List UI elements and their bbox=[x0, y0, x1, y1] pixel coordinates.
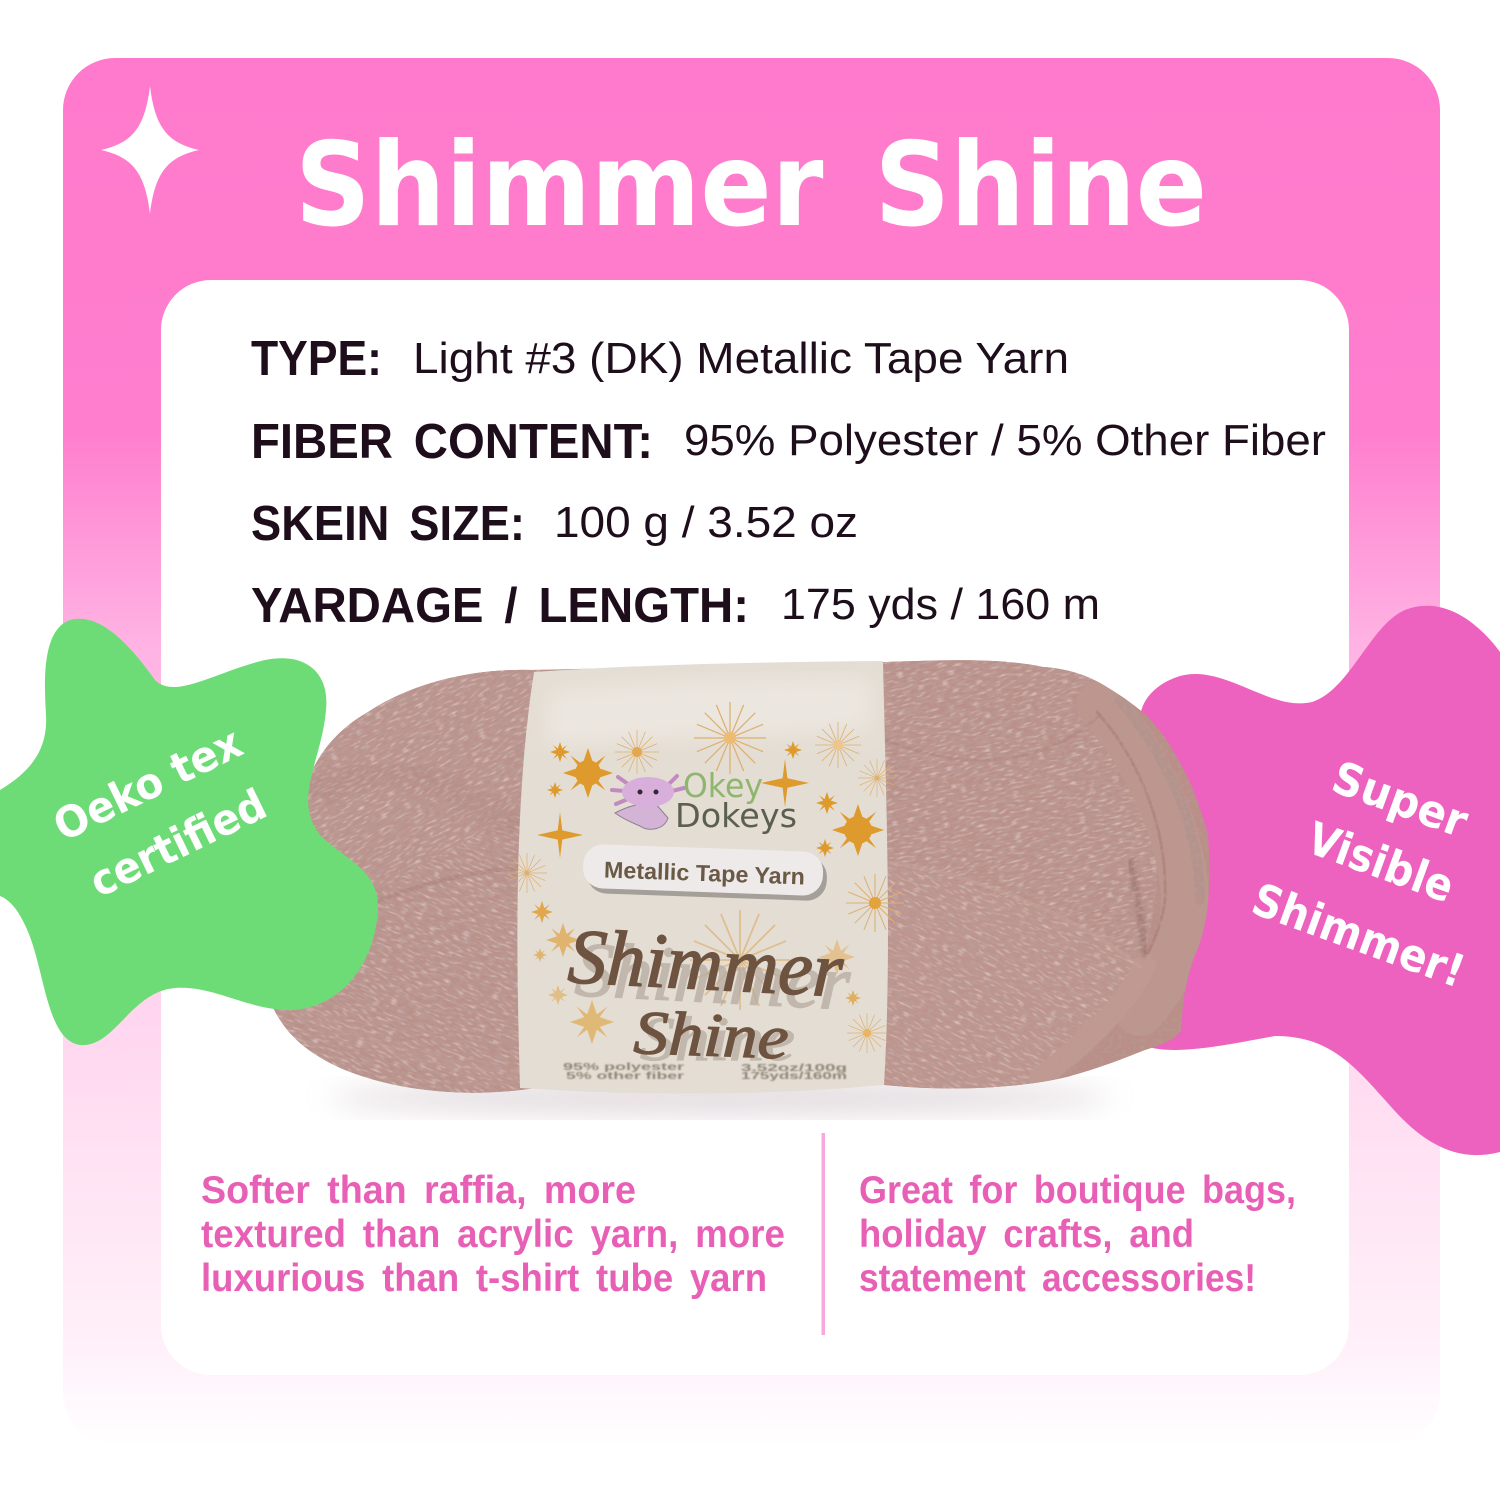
spec: fiber content: FIBER CONTENT: bbox=[251, 415, 653, 469]
text block: uses: statement accessories! bbox=[859, 1257, 1256, 1300]
yarn outer ring strands bbox=[275, 700, 1200, 1078]
spec: type bbox=[251, 332, 1069, 386]
spec: skein size: 100 g / 3.52 oz bbox=[554, 498, 858, 547]
badge text: certified bbox=[82, 780, 275, 908]
badge text: Super bbox=[1325, 751, 1476, 848]
label: product script name: Shimmer bbox=[566, 912, 846, 1013]
text block: comparison bbox=[201, 1169, 785, 1300]
text block: uses bbox=[859, 1169, 1296, 1300]
label: brand name: Okey bbox=[683, 766, 763, 805]
label: soft highlight bbox=[545, 678, 872, 745]
spec: yardage and length: 175 yds / 160 m bbox=[781, 580, 1100, 629]
badge: oeko tex certified bbox=[0, 619, 378, 1045]
label: product script name: Shine bbox=[640, 1006, 795, 1074]
label: fine print: 95% polyester bbox=[563, 1061, 684, 1073]
divider bbox=[822, 1133, 825, 1335]
label: brand name: Dokeys bbox=[675, 796, 797, 835]
badge text: Shimmer! bbox=[1245, 873, 1472, 998]
label: gold stars bbox=[531, 741, 884, 1044]
text block: specifications bbox=[251, 332, 1326, 633]
yarn skein photo illustration bbox=[274, 660, 1210, 1120]
label: metallic tape yarn pill bbox=[582, 844, 828, 901]
label: axolotl mascot bbox=[612, 776, 684, 829]
label: metallic tape yarn pill: Metallic Tape Yarn bbox=[604, 857, 805, 890]
spec: yardage and length: YARDAGE / LENGTH: bbox=[251, 579, 749, 633]
text block: uses: holiday crafts, and bbox=[859, 1213, 1194, 1256]
badge text: Oeko tex bbox=[46, 718, 250, 852]
label: product script name: Shimmer bbox=[573, 925, 853, 1026]
spec: type: Light #3 (DK) Metallic Tape Yarn bbox=[413, 334, 1069, 383]
text block: comparison: Softer than raffia, more bbox=[201, 1169, 636, 1212]
label: starbursts bbox=[507, 702, 904, 1053]
label: fine print: 5% other fiber bbox=[566, 1070, 684, 1082]
icon: white four-point sparkle bbox=[101, 86, 199, 214]
panel: white specification card bbox=[161, 280, 1349, 1375]
yarn label band bbox=[517, 661, 888, 1094]
spec: yardage and length bbox=[251, 579, 1100, 633]
spec: fiber content: 95% Polyester / 5% Other Fiber bbox=[684, 416, 1326, 465]
badge text bbox=[1245, 751, 1476, 998]
yarn ball bbox=[274, 660, 1210, 1093]
spec: type: TYPE: bbox=[251, 332, 382, 386]
label: fine print bbox=[563, 1061, 847, 1082]
yarn knit grain bbox=[278, 662, 1210, 1090]
text block: uses: Great for boutique bags, bbox=[859, 1169, 1296, 1212]
spec: fiber content bbox=[251, 415, 1326, 469]
badge text: Visible bbox=[1300, 812, 1461, 913]
badge: super visible shimmer bbox=[1140, 606, 1500, 1155]
text block: comparison: luxurious than t-shirt tube yarn bbox=[201, 1257, 767, 1300]
label: brand name bbox=[675, 766, 797, 835]
spec: skein size bbox=[251, 497, 858, 551]
label: product script name bbox=[566, 912, 853, 1074]
spec: skein size: SKEIN SIZE: bbox=[251, 497, 525, 551]
yarn shadow bbox=[330, 1080, 1110, 1116]
label: fine print: 175yds/160m bbox=[741, 1070, 847, 1082]
badge text bbox=[46, 718, 275, 908]
label: fine print: 3.52oz/100g bbox=[741, 1062, 847, 1074]
text block: comparison: textured than acrylic yarn, more bbox=[201, 1213, 785, 1256]
title: Shimmer Shine bbox=[295, 118, 1207, 253]
label: product script name: Shine bbox=[633, 999, 790, 1072]
